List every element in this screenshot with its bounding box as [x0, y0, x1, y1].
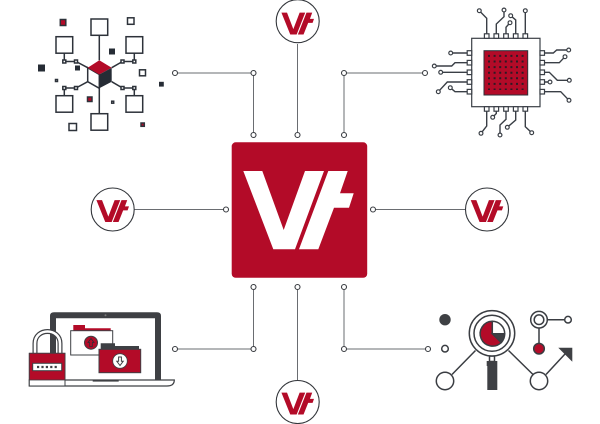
- central logo panel: [232, 142, 367, 278]
- folder with download badge: [99, 343, 141, 373]
- laptop: [29, 312, 174, 386]
- logo badge: left: [91, 188, 134, 231]
- icon: data analytics magnifier: [436, 311, 572, 390]
- logo badge: right: [466, 188, 508, 231]
- logo badge: top: [276, 0, 319, 43]
- connector lines: [134, 44, 466, 380]
- icon: microchip: [432, 8, 571, 137]
- logo badge: bottom: [276, 380, 319, 424]
- magnifier: [469, 311, 515, 390]
- folder with upload badge: [71, 325, 113, 355]
- icon: laptop with lock and folders: [29, 312, 174, 386]
- padlock: [29, 332, 65, 386]
- icon: network cube: [38, 18, 164, 130]
